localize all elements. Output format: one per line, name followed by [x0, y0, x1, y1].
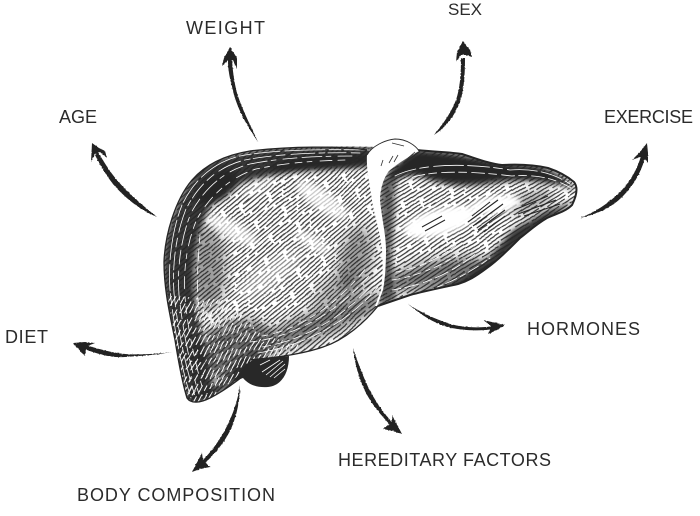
contour strokes	[170, 150, 378, 398]
label: hormones: HORMONES	[527, 319, 640, 339]
arrow: hereditary factors	[353, 348, 402, 434]
label: exercise: EXERCISE	[604, 107, 693, 127]
label: diet: DIET	[5, 327, 48, 347]
arrow: hormones	[408, 304, 505, 334]
label: body composition: BODY COMPOSITION	[77, 485, 275, 505]
falciform ligament	[367, 139, 419, 306]
label: hereditary factors: HEREDITARY FACTORS	[338, 450, 551, 470]
left lobe outline	[378, 150, 576, 306]
label: weight: WEIGHT	[186, 18, 265, 38]
arrow: weight	[222, 47, 258, 142]
arrow: age	[91, 143, 157, 217]
right lobe outline	[164, 147, 378, 402]
arrow: sex	[434, 41, 472, 135]
label: sex: SEX	[448, 0, 482, 19]
shading highlights	[203, 175, 352, 307]
label: age: AGE	[59, 107, 97, 127]
arrow: body composition	[192, 385, 240, 472]
illustration: liver	[163, 138, 578, 403]
lower-left streaks	[167, 296, 299, 402]
arrow: exercise	[580, 143, 648, 218]
shading dark	[163, 146, 391, 404]
left lobe of liver	[378, 151, 576, 305]
arrow: diet	[73, 342, 172, 357]
gallbladder	[232, 356, 289, 387]
right lobe of liver	[164, 146, 383, 402]
